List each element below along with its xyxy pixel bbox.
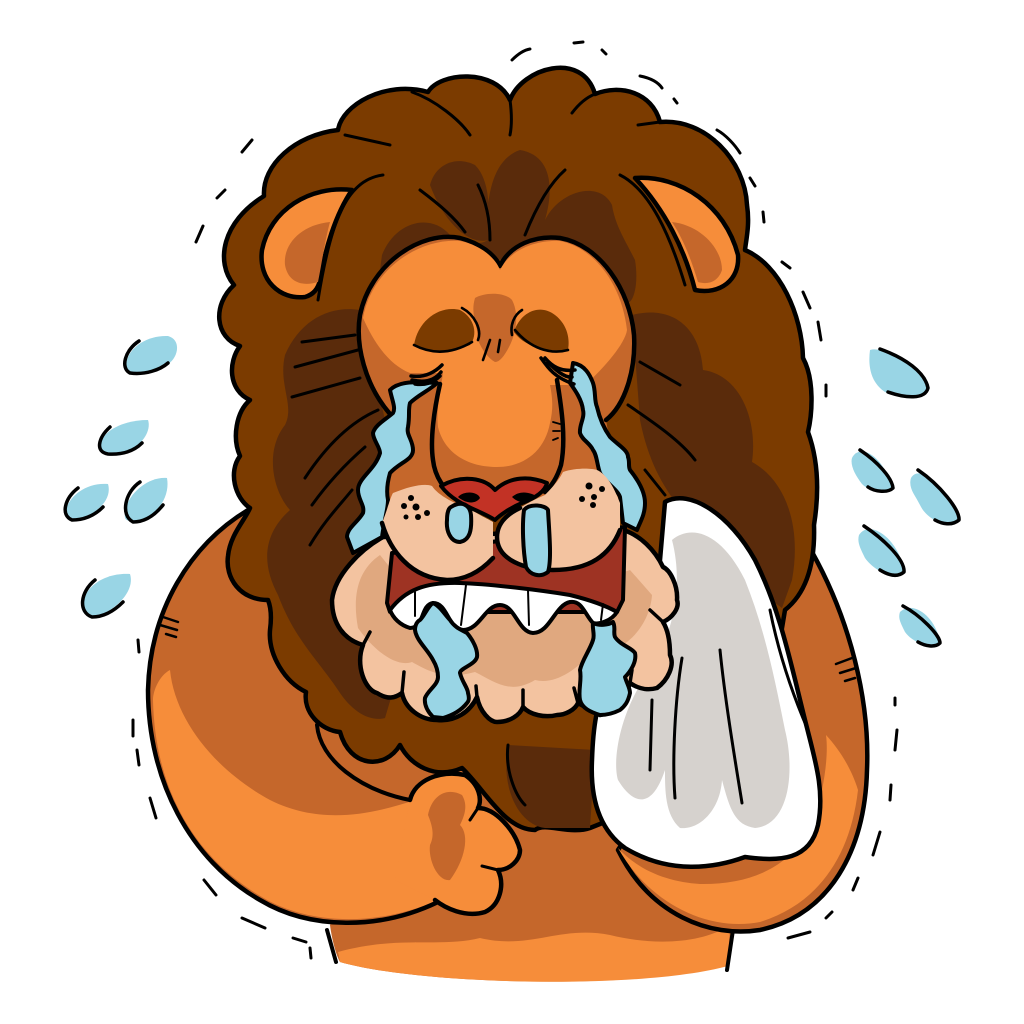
teardrops left (65, 336, 959, 645)
teardrop outlines and shake marks (65, 42, 959, 958)
left arm (148, 510, 500, 923)
nose bridge lines (432, 380, 563, 497)
right ear (635, 178, 738, 291)
beard (332, 530, 678, 722)
left ear (262, 189, 352, 297)
tear streak left (347, 382, 437, 553)
right arm (618, 552, 867, 932)
right cheek (497, 469, 620, 570)
mane (219, 68, 817, 830)
nose drip left (447, 504, 471, 542)
handkerchief (592, 498, 820, 867)
head (359, 237, 634, 505)
left cheek (382, 485, 493, 580)
nose drip right (523, 505, 550, 575)
tear on right of chin (579, 622, 635, 715)
teeth (390, 583, 617, 633)
red nose (441, 478, 547, 520)
torso (327, 760, 733, 982)
paw (395, 774, 520, 914)
tear streak right (570, 363, 645, 530)
eyelashes (411, 358, 575, 384)
tear on left of chin (415, 603, 477, 718)
eyes and brow (414, 294, 569, 362)
mouth (387, 527, 625, 612)
